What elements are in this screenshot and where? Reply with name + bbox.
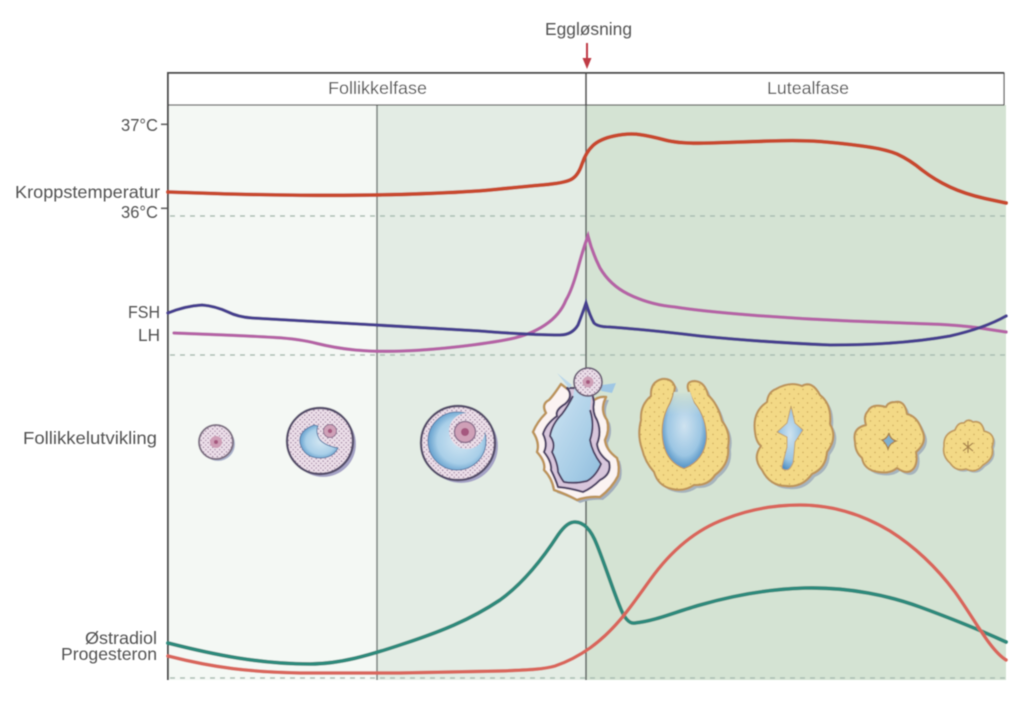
axis labels: 36°C <box>121 202 158 222</box>
heading: Lutealfase: Lutealfase <box>767 78 849 98</box>
line: FSH <box>168 303 1006 345</box>
chart frame <box>168 73 1004 680</box>
corpus luteum stage 7 <box>854 402 927 476</box>
axis labels: FSH <box>128 302 160 322</box>
header bar: phases <box>168 73 1004 105</box>
follicle stage 2 <box>287 408 356 477</box>
follicle stage 3 <box>421 406 498 483</box>
heading: Follikkelfase: Follikkelfase <box>328 78 427 98</box>
arrow: ovulation <box>582 43 592 69</box>
axis labels: 37°C <box>121 115 158 135</box>
line: estradiol <box>168 522 1006 664</box>
follicle stage 4: ovulating <box>533 368 622 503</box>
corpus luteum stage 5 <box>639 379 732 493</box>
corpus luteum stage 8 <box>944 420 995 473</box>
background: luteal phase <box>586 105 1006 680</box>
axis labels: Kroppstemperatur <box>15 182 160 202</box>
follicle stage 1 <box>199 425 235 461</box>
axis labels: Østradiol <box>85 628 157 648</box>
background: follicular phase early <box>168 105 377 680</box>
line: body temperature <box>168 134 1006 203</box>
axis labels: LH <box>138 325 160 345</box>
background: follicular phase late <box>377 105 586 680</box>
line: progesterone <box>168 505 1006 673</box>
axis labels <box>15 115 167 664</box>
ovulation label: Eggløsning <box>545 19 632 39</box>
axis labels: Progesteron <box>61 644 157 664</box>
corpus luteum stage 6 <box>754 384 836 489</box>
line: LH <box>174 236 1006 351</box>
axis labels: Follikkelutvikling <box>23 428 157 448</box>
